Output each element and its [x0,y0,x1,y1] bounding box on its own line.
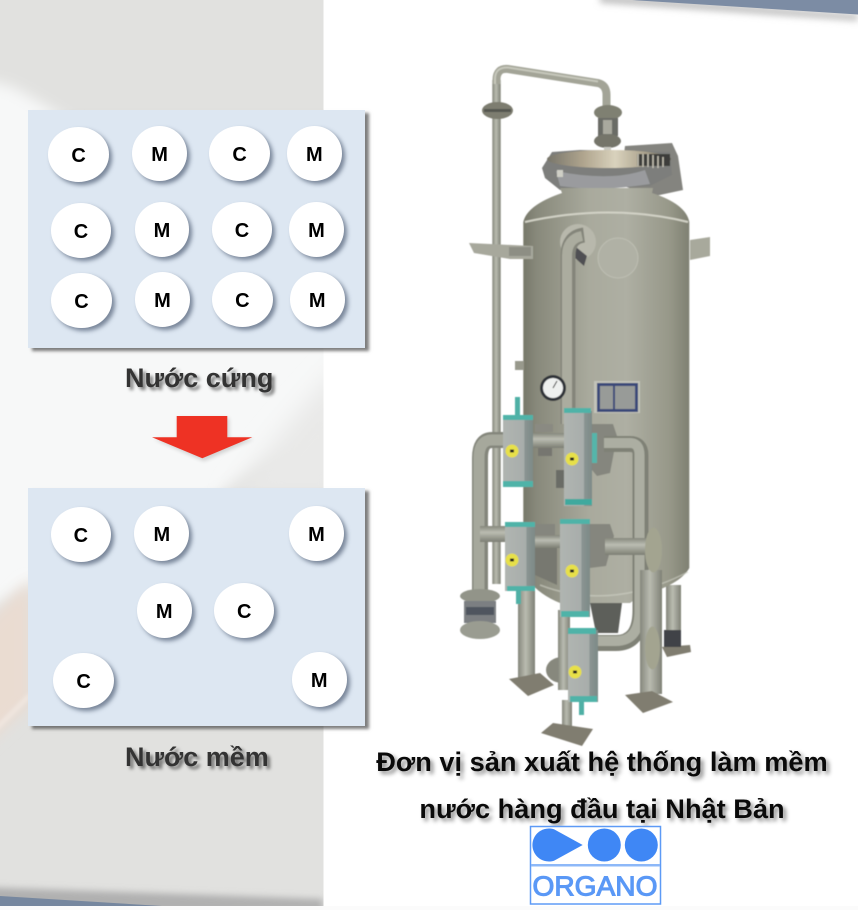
right front leg [625,570,673,713]
valve actuator bottom [568,628,598,715]
particle M row 3 second: M [309,290,326,312]
particle C row 1 second: C [232,144,247,166]
pressure gauge [540,375,566,401]
particle C bottom left [53,653,114,708]
particle C top left [51,507,111,562]
particle M top right [289,506,344,561]
back couplings [535,424,622,633]
pipework left [460,440,508,639]
particle M top: M [153,524,170,546]
logo teardrop [532,828,583,862]
particle M row 2 [135,202,189,257]
particle M middle [137,583,192,638]
tank stub pipe [515,361,524,370]
pipework middle [530,433,566,548]
label: hard water: Nước cứng [125,363,273,393]
tank shoulder seam [525,212,688,222]
label: soft water: Nước mềm [125,742,269,772]
particle group: hard water [48,126,351,334]
particle C row 1: C [71,145,86,167]
particle C row 1 second [209,126,270,181]
back right leg [662,585,691,657]
particle C row 2 [51,203,111,258]
pipework right loop [596,443,647,643]
caption line 2: nước hàng đầu tại Nhật Bản [419,793,785,824]
particle C row 3 second: C [235,290,250,312]
particle M row 2 second: M [308,220,325,242]
particle C row 2 second [212,202,272,257]
particle C middle: C [237,601,251,623]
logo divider [531,864,660,866]
pipe flanges right [645,528,662,670]
logo: ORGANO [530,826,662,905]
particle M bottom right [292,652,347,707]
water softener tank photo illustration [460,64,710,746]
particle C row 2 second: C [235,220,249,242]
particle M row 3 [135,272,190,327]
valve actuator middle right [560,519,590,617]
lid flange [542,150,672,190]
particle group: soft water [51,506,353,714]
particle M row 2 second [289,202,344,257]
particle M row 2: M [154,220,170,242]
valve actuator middle left [505,522,535,604]
logo circle two [625,828,658,862]
particle C middle [214,583,274,638]
tank bottom seam [540,572,688,596]
thin vertical pipe [482,67,606,584]
logo frame [530,826,660,904]
valve actuator top left [503,397,533,487]
caption line 1: Đơn vị sản xuất hệ thống làm mềm [376,746,828,777]
particle M top [134,506,189,561]
left front leg [509,590,554,696]
logo wordmark: ORGANO [532,870,658,902]
particle C row 1 [48,127,109,182]
particle M row 1 second [287,126,342,181]
particle C row 3 second [212,272,273,327]
panel: hard water particles [28,110,365,348]
nameplate [594,381,640,413]
particle M bottom right: M [311,670,328,692]
valve actuator top right [564,408,597,506]
particle C top left: C [74,525,88,547]
caption: leading manufacturer [376,746,832,828]
arrow: hard to soft [152,416,252,462]
particle C row 3 [51,273,112,328]
left bracket [469,243,533,259]
panel: soft water particles [28,488,365,726]
round manhole patch [598,238,638,278]
particle C row 2: C [74,221,88,243]
particle M row 3 second [290,272,345,327]
logo circle one [588,828,621,862]
particle M row 3: M [154,290,171,312]
particle M middle: M [156,601,173,623]
top valve stack [594,105,622,164]
particle C row 3: C [74,291,89,313]
particle M row 1 second: M [306,144,323,166]
particle C bottom left: C [76,671,91,693]
right bracket [690,237,710,260]
lid wedge [620,143,683,196]
particle M row 1 [132,126,187,181]
particle M row 1: M [151,144,168,166]
particle M top right: M [308,524,325,546]
long pipe on tank [560,224,596,424]
tank body [523,188,689,603]
center leg [541,610,593,746]
